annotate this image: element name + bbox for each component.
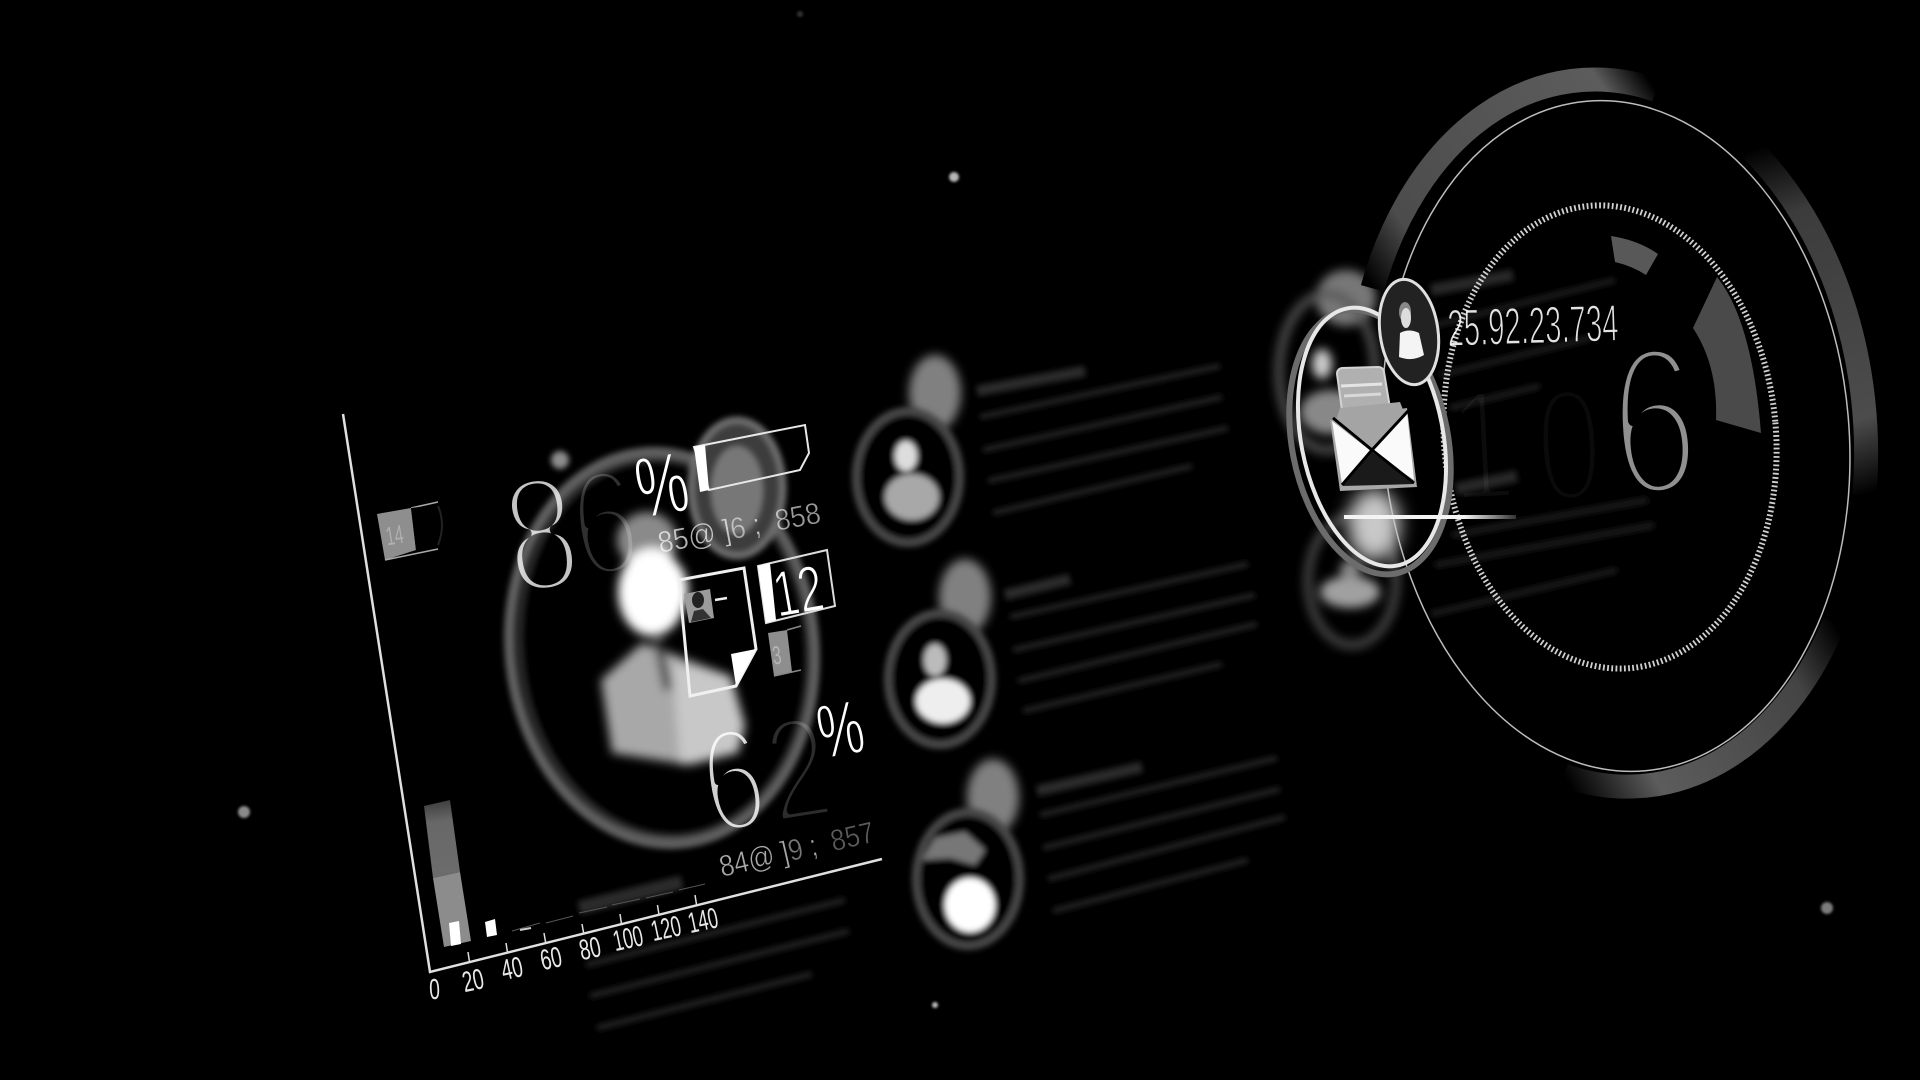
axis labels: 100 — [610, 920, 646, 958]
tall bar — [424, 800, 471, 947]
avatar — [939, 559, 991, 635]
axis labels: 40 — [498, 952, 526, 987]
letter — [1337, 367, 1392, 432]
stat: 62% — [690, 683, 878, 884]
white ring — [1277, 295, 1467, 579]
panel: profile portrait (blurred) — [490, 420, 834, 859]
chart axes — [343, 414, 882, 972]
axis labels — [428, 902, 721, 1006]
value label: 84@ ]9 ; 857 — [716, 816, 878, 884]
panel: radial gauge — [1355, 58, 1895, 806]
thin outer ring — [1355, 81, 1877, 791]
flat bars — [512, 884, 705, 931]
badge 3: 3 — [770, 641, 783, 671]
short bar — [485, 919, 497, 937]
axis labels: 120 — [648, 910, 684, 948]
IP number: 25.92.23.734 — [1447, 295, 1619, 358]
faded digits: 1 — [1445, 354, 1520, 536]
photo thumbnail — [684, 589, 714, 623]
icon: person badge — [1373, 275, 1445, 389]
blurred avatar upper — [1279, 270, 1376, 450]
outer arcs — [1356, 58, 1895, 806]
panel: bar chart — [343, 414, 882, 1006]
connector line — [1344, 515, 1516, 519]
digit 8: 8 — [493, 440, 590, 630]
value label: 85@ ]6 ; 858 — [655, 497, 823, 560]
panel: blurred caption under chart — [579, 882, 849, 1028]
gauge segment right — [1693, 277, 1761, 433]
axis labels: 20 — [459, 964, 487, 999]
panel: contact row 2 — [888, 559, 1257, 745]
blurred text lines — [1431, 275, 1654, 614]
tag 12: 12 — [768, 551, 829, 631]
page fold — [731, 649, 756, 686]
progress tag — [694, 425, 809, 492]
digit 6: 6 — [690, 694, 777, 866]
badge 3 — [768, 626, 801, 676]
axis labels: 60 — [537, 942, 565, 977]
axis labels: 140 — [685, 902, 721, 940]
icon: envelope — [1330, 367, 1417, 491]
avatar — [967, 759, 1019, 835]
gray ring — [1268, 296, 1472, 588]
digit 6 faded: 6 — [560, 435, 650, 610]
badge 14 — [377, 502, 442, 560]
panel: mail badge — [1268, 275, 1619, 588]
panel: contact row 1 — [856, 355, 1228, 543]
panel: blurred contacts behind gauge — [1279, 270, 1654, 645]
portrait ring — [490, 420, 834, 859]
icon: document — [679, 568, 756, 696]
axis ticks — [468, 895, 697, 962]
dotted ring — [1424, 191, 1796, 683]
glow beneath mail icon — [1348, 489, 1400, 561]
percent sign: % — [628, 432, 696, 537]
axis labels: 0 — [428, 974, 441, 1006]
blurred avatar lower — [1308, 517, 1396, 645]
faded digits: 0 — [1532, 354, 1607, 536]
stat: 86% — [493, 432, 823, 630]
floating particles — [238, 11, 1833, 1008]
percent sign: % — [810, 683, 870, 775]
portrait figure — [601, 512, 745, 765]
gauge segment top — [1611, 236, 1658, 275]
big digit 6: 6 — [1604, 300, 1704, 542]
panel: contact row 3 — [916, 758, 1285, 946]
axis labels: 80 — [576, 932, 604, 967]
faded digits — [1445, 354, 1607, 536]
badge 14: 14 — [384, 520, 406, 551]
envelope body — [1330, 408, 1417, 491]
avatar — [909, 355, 961, 431]
digit 2 faded: 2 — [755, 683, 842, 855]
